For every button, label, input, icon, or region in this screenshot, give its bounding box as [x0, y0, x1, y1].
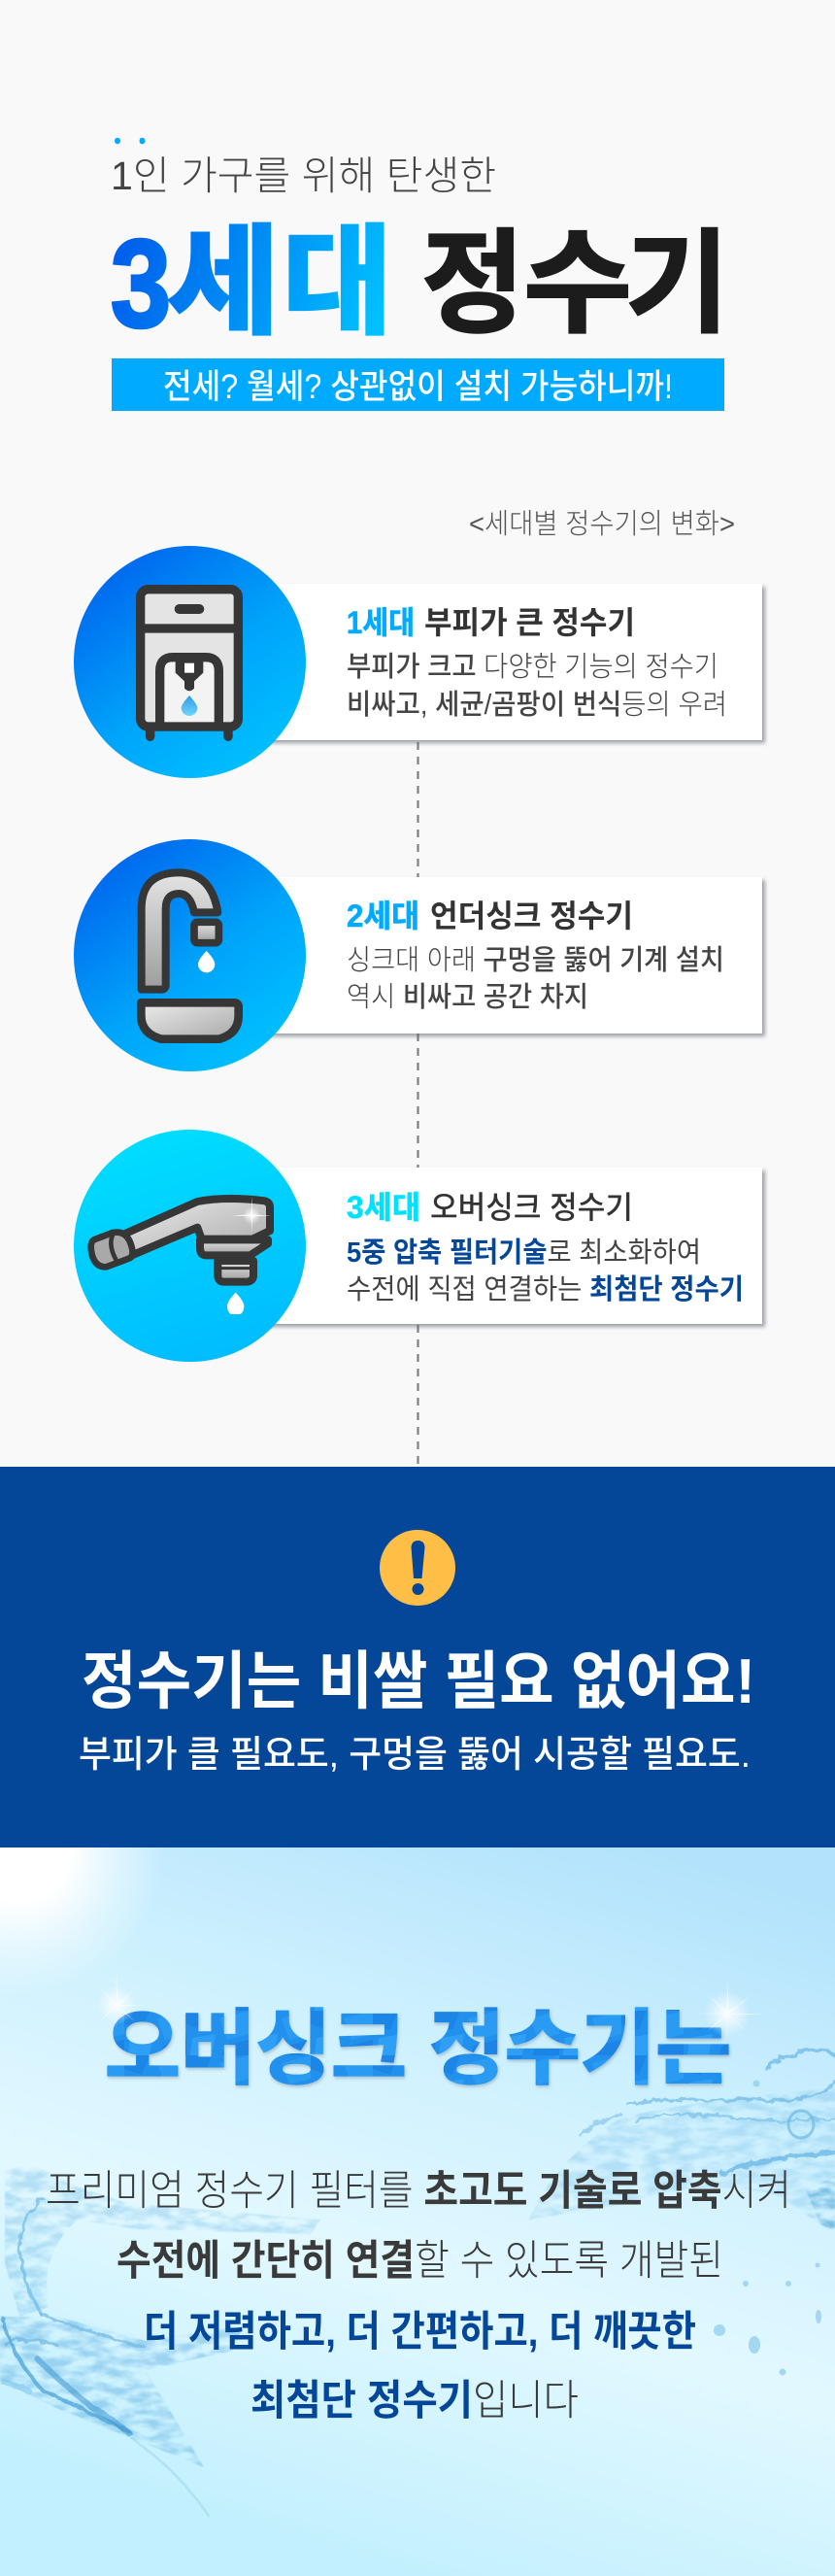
icon: warning — [380, 1530, 455, 1606]
title: 3세대 — [111, 215, 392, 354]
sparkle right — [692, 1979, 768, 2041]
subheading: 부피가 클 필요도, 구멍을 뚫어 시공할 필요도. — [79, 1735, 751, 1776]
icon: floor water purifier — [141, 590, 238, 741]
water droplets — [714, 2081, 821, 2376]
card heading: 3세대 — [347, 1190, 420, 1225]
water splash: left mist — [0, 2167, 320, 2467]
card heading — [347, 1190, 633, 1225]
card heading: 1세대 — [347, 605, 415, 640]
body line 4: 최첨단 정수기입니다 — [250, 2378, 579, 2424]
water splash: right mist — [529, 2088, 835, 2234]
icon: over-sink faucet — [91, 1196, 271, 1314]
tagline bar — [112, 358, 724, 411]
sparkle left — [87, 1972, 146, 2030]
header — [111, 138, 735, 540]
title: 3세대: 대 — [283, 217, 392, 349]
water splash: left strokes — [3, 2198, 209, 2516]
card heading: 부피가 큰 정수기 — [424, 605, 635, 640]
tagline text: 전세? 월세? 상관없이 설치 가능하니까! — [163, 368, 673, 406]
card description line 2: 역시 비싸고 공간 차지 — [347, 981, 588, 1013]
sparkle — [231, 1196, 271, 1234]
panel: over-sink explanation — [0, 1847, 835, 2576]
water splash: right strokes — [580, 2050, 835, 2173]
title: 3세대: 세 — [167, 217, 280, 349]
water background — [0, 1847, 835, 2576]
subtitle: 1인 가구를 위해 탄생한 — [111, 153, 496, 198]
page background — [0, 0, 835, 1467]
title: 3세대: 3 — [111, 215, 171, 354]
card — [252, 1168, 762, 1324]
card heading: 언더싱크 정수기 — [430, 898, 633, 933]
body line 2: 수전에 간단히 연결할 수 있도록 개발된 — [117, 2238, 723, 2285]
card description line 1: 부피가 크고 다양한 기능의 정수기 — [347, 651, 718, 683]
title: 정수기: 정 — [421, 220, 524, 347]
panel: 2nd generation — [74, 839, 762, 1071]
title: 정수기: 수 — [523, 220, 632, 347]
card heading — [347, 898, 633, 933]
panel: navy message — [0, 1467, 835, 1847]
body line 1: 프리미엄 정수기 필터를 초고도 기술로 압축시켜 — [46, 2168, 791, 2215]
card description line 1: 5중 압축 필터기술로 최소화하여 — [347, 1237, 701, 1269]
navy band — [0, 1467, 835, 1847]
card description line 2: 수전에 직접 연결하는 최첨단 정수기 — [347, 1273, 744, 1305]
card — [252, 584, 762, 740]
circle — [74, 1130, 306, 1362]
section caption: <세대별 정수기의 변화> — [469, 509, 735, 540]
emphasis dots — [115, 138, 146, 144]
card heading: 2세대 — [347, 898, 419, 933]
card description line 2: 비싸고, 세균/곰팡이 번식등의 우려 — [347, 689, 727, 721]
icon: under-sink faucet — [141, 872, 239, 1039]
card — [252, 877, 762, 1034]
circle — [74, 546, 306, 778]
panel: 1st generation — [74, 546, 762, 778]
heading: 오버싱크 정수기는 — [105, 2003, 731, 2094]
card description line 1: 싱크대 아래 구멍을 뚫어 기계 설치 — [347, 944, 724, 976]
timeline dashed connector — [417, 742, 419, 1465]
heading: 정수기는 비쌀 필요 없어요! — [82, 1645, 755, 1716]
panel: 3rd generation — [74, 1130, 762, 1362]
title: 정수기: 기 — [625, 220, 729, 347]
body line 3: 더 저렴하고, 더 간편하고, 더 깨끗한 — [144, 2309, 696, 2356]
card heading: 오버싱크 정수기 — [430, 1190, 633, 1225]
circle — [74, 839, 306, 1071]
title: 정수기 — [421, 220, 729, 347]
sunlight — [0, 1847, 170, 1998]
